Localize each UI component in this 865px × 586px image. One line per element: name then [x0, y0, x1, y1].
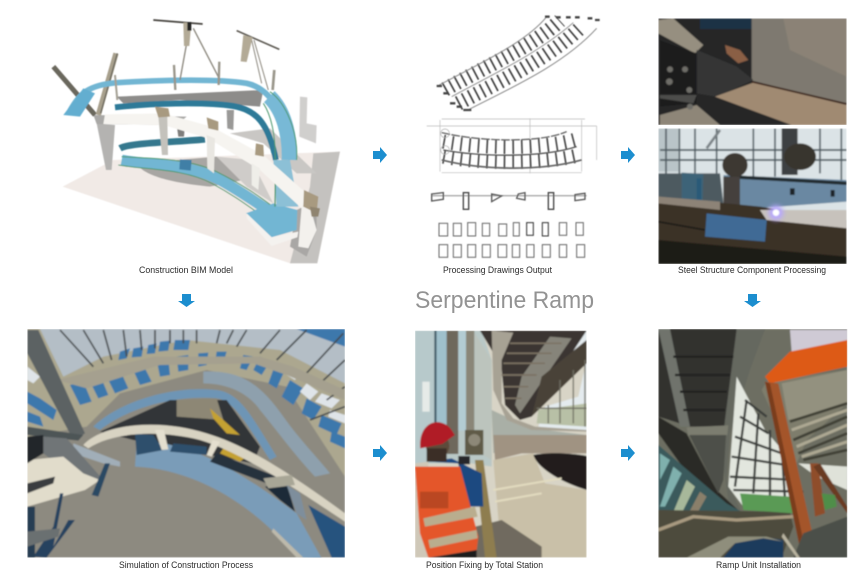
caption: steel structure component processing: Steel Structure Component Processing	[678, 265, 826, 275]
arrow: BIM model down	[178, 294, 195, 307]
panel: steel component photo bottom	[658, 128, 847, 264]
panel: simulation of construction process	[27, 329, 345, 558]
caption: position fixing by total station: Position Fixing by Total Station	[426, 560, 543, 570]
arrow: processing down	[744, 294, 761, 307]
arrow: BIM to drawings	[373, 147, 387, 163]
panel: position fixing by total station	[415, 331, 587, 558]
arrow: simulation to position fixing	[373, 445, 387, 461]
caption: processing drawings output: Processing Drawings Output	[443, 265, 552, 275]
panel: ramp unit installation	[658, 329, 847, 558]
arrow: drawings to processing	[621, 147, 635, 163]
arrow: position fixing to installation	[621, 445, 635, 461]
caption: simulation of construction process: Simulation of Construction Process	[119, 560, 253, 570]
panel: construction BIM model	[53, 20, 340, 263]
panel: processing drawings	[427, 17, 600, 257]
panel: steel component photo top	[658, 18, 847, 125]
caption: construction BIM model: Construction BIM Model	[139, 265, 233, 275]
caption: ramp unit installation: Ramp Unit Installation	[716, 560, 801, 570]
title: Serpentine Ramp	[415, 287, 594, 314]
